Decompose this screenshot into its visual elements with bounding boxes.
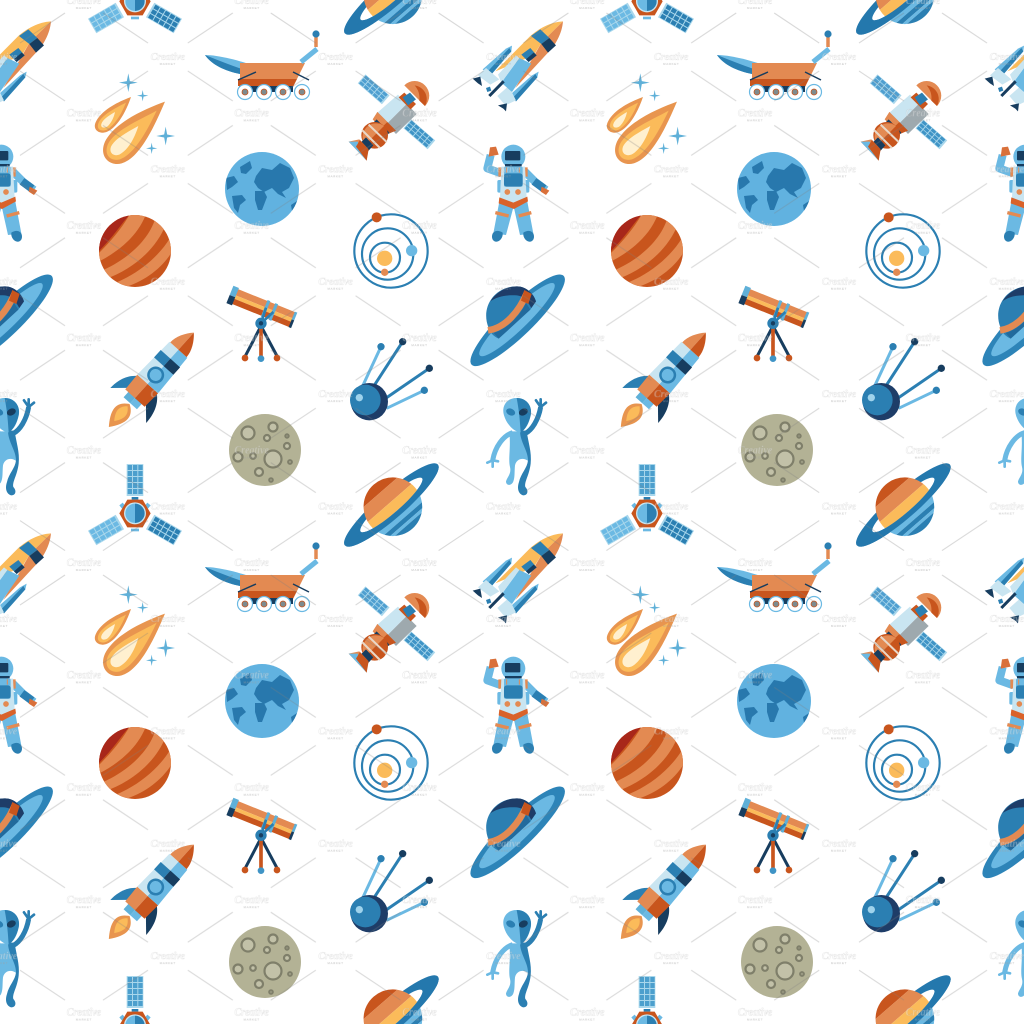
icon: alien — [0, 398, 34, 495]
icon: moon — [741, 414, 813, 486]
icon: space shuttle — [0, 533, 51, 623]
icon: jupiter — [610, 212, 686, 288]
icon: astronaut — [487, 657, 549, 754]
icon: telescope — [738, 798, 810, 874]
icon: space shuttle — [0, 21, 51, 111]
icon: alien — [999, 910, 1024, 1007]
icon: earth — [225, 664, 299, 738]
icon: comets and stars — [607, 585, 687, 676]
icon: ringed planet — [838, 954, 973, 1024]
icon: ringed planet — [326, 954, 461, 1024]
icon: flying saucer — [461, 265, 574, 376]
icon: three-panel satellite — [600, 976, 694, 1024]
icon: alien — [487, 398, 546, 495]
icon: astronaut — [0, 657, 37, 754]
icon: earth — [737, 664, 811, 738]
icon: ringed planet — [838, 0, 973, 60]
icon: moon — [741, 926, 813, 998]
icon: sputnik — [350, 850, 433, 932]
icon: jupiter — [98, 724, 174, 800]
icon: flying saucer — [973, 265, 1024, 376]
icon: moon — [229, 926, 301, 998]
icon: lunar rover — [205, 30, 320, 99]
icon: astronaut — [487, 145, 549, 242]
icon: sputnik — [862, 850, 945, 932]
icon: comets and stars — [95, 585, 175, 676]
icon: space station — [349, 586, 435, 673]
icon: jupiter — [610, 724, 686, 800]
icon: rocket — [90, 828, 212, 956]
icon: space shuttle — [473, 21, 563, 111]
icon: flying saucer — [0, 265, 62, 376]
icon: flying saucer — [0, 777, 62, 888]
icon: flying saucer — [461, 777, 574, 888]
icon: lunar rover — [717, 542, 832, 612]
icon: ringed planet — [838, 442, 973, 572]
icon: alien — [999, 398, 1024, 495]
icon: solar system — [866, 212, 940, 288]
icon: rocket — [90, 316, 212, 444]
icon: rocket — [602, 828, 724, 956]
icon: alien — [487, 910, 546, 1007]
icon: comets and stars — [607, 73, 687, 164]
icon: three-panel satellite — [88, 0, 182, 33]
icon: comets and stars — [95, 73, 175, 164]
icon: telescope — [226, 286, 298, 362]
icon: three-panel satellite — [88, 976, 182, 1024]
icon: space shuttle — [985, 21, 1024, 111]
icon: space station — [349, 74, 435, 161]
icon: earth — [225, 152, 299, 226]
icon: telescope — [226, 798, 298, 874]
icon: astronaut — [999, 145, 1024, 242]
icon: three-panel satellite — [88, 464, 182, 545]
icon: solar system — [866, 724, 940, 800]
icon: sputnik — [350, 338, 433, 420]
icon: jupiter — [98, 212, 174, 288]
icon: solar system — [354, 212, 428, 288]
icon: ringed planet — [326, 0, 461, 60]
icon: ringed planet — [326, 442, 461, 572]
icon: astronaut — [999, 657, 1024, 754]
icon: lunar rover — [205, 542, 320, 612]
icon: rocket — [602, 316, 724, 444]
icon: sputnik — [862, 338, 945, 420]
icon: earth — [737, 152, 811, 226]
icon: space shuttle — [985, 533, 1024, 623]
icon: three-panel satellite — [600, 464, 694, 545]
icon: moon — [229, 414, 301, 486]
icon: lunar rover — [717, 30, 832, 99]
icon: flying saucer — [973, 777, 1024, 888]
icon: astronaut — [0, 145, 37, 242]
icon: alien — [0, 910, 34, 1007]
icon: space shuttle — [473, 533, 563, 623]
icon: solar system — [354, 724, 428, 800]
icon: space station — [861, 74, 947, 161]
icon: three-panel satellite — [600, 0, 694, 33]
icon: space station — [861, 586, 947, 673]
icon: telescope — [738, 286, 810, 362]
